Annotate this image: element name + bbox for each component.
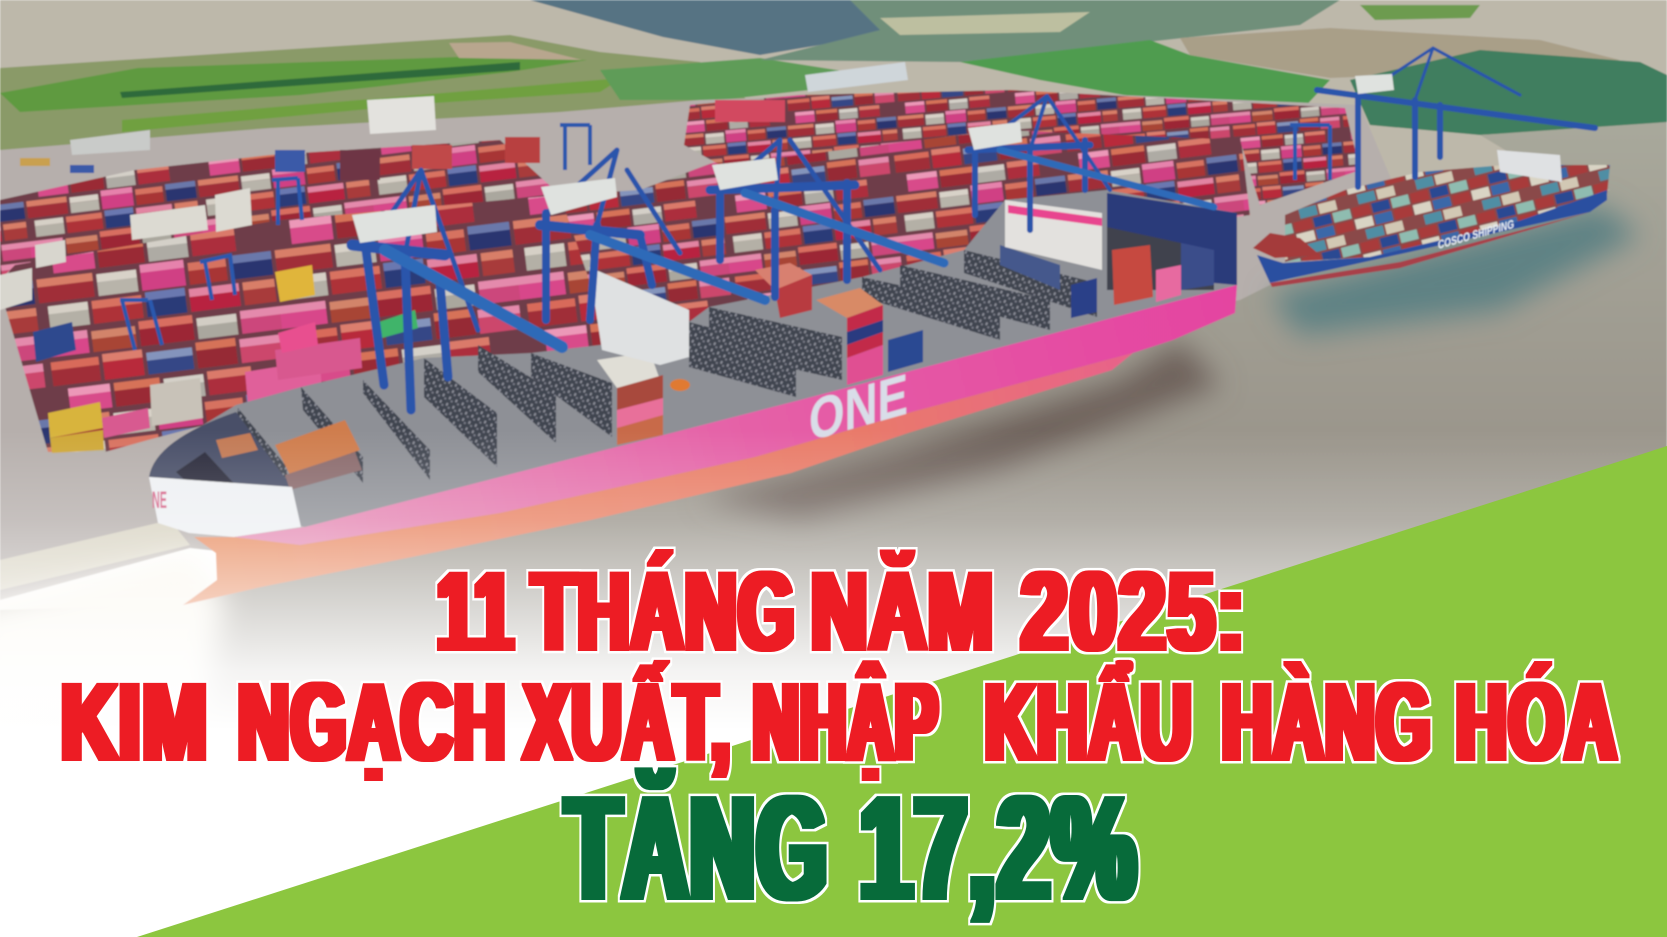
green diagonal panel <box>137 446 1667 937</box>
bare ground at top right <box>1180 28 1620 78</box>
second green field <box>122 78 622 132</box>
orange lifeboat <box>670 379 690 391</box>
green field, centre left <box>600 58 900 100</box>
title line 2: XUẤT, <box>524 661 732 784</box>
COSCO SHIPPING hull lettering: COSCO SHIPPING <box>1438 217 1514 252</box>
title line 2: NGẠCH <box>238 661 507 784</box>
crane 2 <box>540 150 765 320</box>
container stacks on second ship <box>1285 165 1610 262</box>
island and grass <box>1360 5 1480 20</box>
deck of main ship <box>170 190 1237 527</box>
blue hull of second ship <box>1257 190 1607 283</box>
main hull: pink topsides <box>234 285 1237 545</box>
title line 2: NHẬP <box>753 661 939 784</box>
title line 2 <box>61 661 1618 784</box>
teal reflection of second ship <box>1270 205 1640 335</box>
title block <box>61 549 1618 931</box>
reclaimed land and sea wall, top left <box>0 35 760 160</box>
white bridge superstructure <box>589 267 689 365</box>
dock cranes <box>352 48 1595 410</box>
dark tree line <box>120 62 520 98</box>
container yard, large stacks at left <box>0 190 640 452</box>
sparse containers near buildings <box>20 100 785 180</box>
left ground and dock apron <box>0 90 1400 600</box>
red bow deck <box>1253 233 1320 258</box>
title line 1: 11 <box>437 549 515 674</box>
deck container stacks on main ship <box>597 240 1214 445</box>
pale dock strip <box>0 520 190 590</box>
container yard, far distance <box>684 90 1360 205</box>
white superstructure <box>1497 150 1562 182</box>
title line 1: NĂM <box>811 549 995 674</box>
headline figure: TĂNG <box>566 766 829 931</box>
dark reflection under main hull <box>700 340 1220 520</box>
title line 1 <box>437 549 1247 674</box>
highlighted containers in the yard <box>0 188 418 453</box>
small yard gantry cranes <box>120 125 1330 350</box>
crane 1 <box>352 170 562 410</box>
pale water, lower left <box>0 555 225 740</box>
crane 3 <box>710 140 944 297</box>
ponds and land at top centre <box>760 0 1340 62</box>
green field, top left <box>0 57 587 112</box>
crane 5 at second ship <box>1317 48 1595 187</box>
navy forward container block <box>1107 193 1237 285</box>
tree belt at right <box>1350 50 1667 135</box>
green field at top right centre <box>960 40 1330 112</box>
stern well and white stern band: NE <box>152 487 167 514</box>
red waterline of second ship <box>1270 212 1590 287</box>
pale ponds <box>880 12 1090 35</box>
tan ground patch <box>449 42 582 60</box>
ship cargo bays and lattice lashing frames <box>236 225 1214 487</box>
crane 4 <box>968 96 1214 230</box>
buildings on shore <box>70 62 908 155</box>
town at top centre <box>530 0 960 55</box>
title line 1: THÁNG <box>532 549 796 674</box>
white deckhouse with pink stripes <box>1005 200 1102 270</box>
white fade over lower photo <box>0 430 1667 937</box>
stern well and white stern band <box>149 412 362 537</box>
title line 1: 2025: <box>1021 549 1247 674</box>
main hull: orange lower section <box>183 353 1133 605</box>
title line 2: KIM <box>61 661 209 784</box>
title line 2: HÀNG <box>1222 661 1432 784</box>
title line 2: KHẨU <box>985 661 1193 784</box>
container yard, mid distance <box>0 130 1250 370</box>
second ship: COSCO Shipping <box>1253 150 1610 287</box>
headline figure: 17,2% <box>860 766 1138 931</box>
estuary water, top <box>0 0 1667 300</box>
ONE hull lettering: ONE <box>809 360 908 454</box>
